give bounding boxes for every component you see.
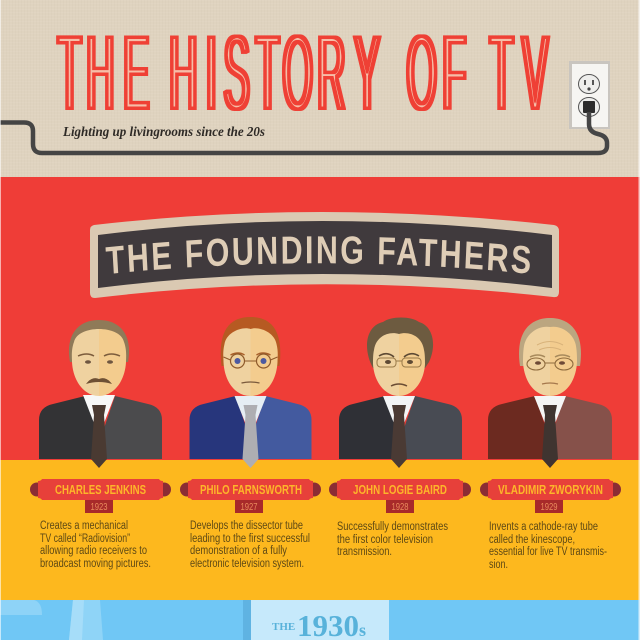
year: 1923 <box>90 502 108 513</box>
description: essential for live TV transmis- <box>489 546 607 558</box>
description: Successfully demonstrates <box>337 521 448 533</box>
description: allowing radio receivers to <box>40 545 147 557</box>
biography: John Logie Baird <box>329 479 471 558</box>
panel: founding fathers red background <box>0 177 640 461</box>
description: TV called “Radiovision” <box>40 533 130 545</box>
section heading: the 1930s: s <box>359 620 366 640</box>
year <box>235 500 263 513</box>
description <box>337 521 448 558</box>
banner heading: THE FOUNDING FATHERS <box>106 236 530 274</box>
portrait: Charles Jenkins <box>39 320 162 468</box>
description: Develops the dissector tube <box>190 520 303 532</box>
section heading: the 1930s: THE <box>272 621 295 633</box>
description <box>489 521 607 571</box>
year <box>85 500 113 513</box>
description: leading to the first successful <box>190 533 310 545</box>
icon: wall outlet <box>569 61 610 129</box>
description: broadcast moving pictures. <box>40 558 151 570</box>
year <box>386 500 414 513</box>
name ribbon: CHARLES JENKINS <box>55 482 146 497</box>
title: THE HISTORY OF TV <box>58 14 548 134</box>
description: demonstration of a fully <box>190 545 287 557</box>
name ribbon <box>329 479 471 500</box>
name ribbon: JOHN LOGIE BAIRD <box>353 482 447 497</box>
year: 1927 <box>240 502 258 513</box>
description <box>40 520 151 570</box>
portrait: Philo Farnsworth <box>190 317 312 468</box>
power cord <box>0 112 607 153</box>
name ribbon: PHILO FARNSWORTH <box>200 482 302 497</box>
description: sion. <box>489 559 508 571</box>
description: Creates a mechanical <box>40 520 128 532</box>
description: transmission. <box>337 546 392 558</box>
subtitle: Lighting up livingrooms since the 20s <box>62 125 265 140</box>
panel: biographies yellow background <box>0 460 640 600</box>
biography: Charles Jenkins <box>30 479 171 570</box>
description <box>190 520 310 570</box>
description: electronic television system. <box>190 558 304 570</box>
panel: 1930s section background <box>0 600 640 640</box>
biography: Vladimir Zworykin <box>480 479 621 571</box>
name ribbon <box>480 479 621 500</box>
description: called the kinescope, <box>489 534 575 546</box>
name ribbon <box>180 479 321 500</box>
name ribbon <box>30 479 171 500</box>
year: 1929 <box>540 502 558 513</box>
description: Invents a cathode-ray tube <box>489 521 598 533</box>
banner: the founding fathers <box>90 212 559 298</box>
portrait: John Logie Baird <box>339 318 462 468</box>
portrait: Vladimir Zworykin <box>488 318 612 468</box>
name ribbon: VLADIMIR ZWORYKIN <box>498 482 603 497</box>
panel: title header background <box>0 0 640 178</box>
year: 1928 <box>392 502 409 513</box>
description: the first color television <box>337 534 433 546</box>
year <box>535 500 563 513</box>
biography: Philo Farnsworth <box>180 479 321 570</box>
